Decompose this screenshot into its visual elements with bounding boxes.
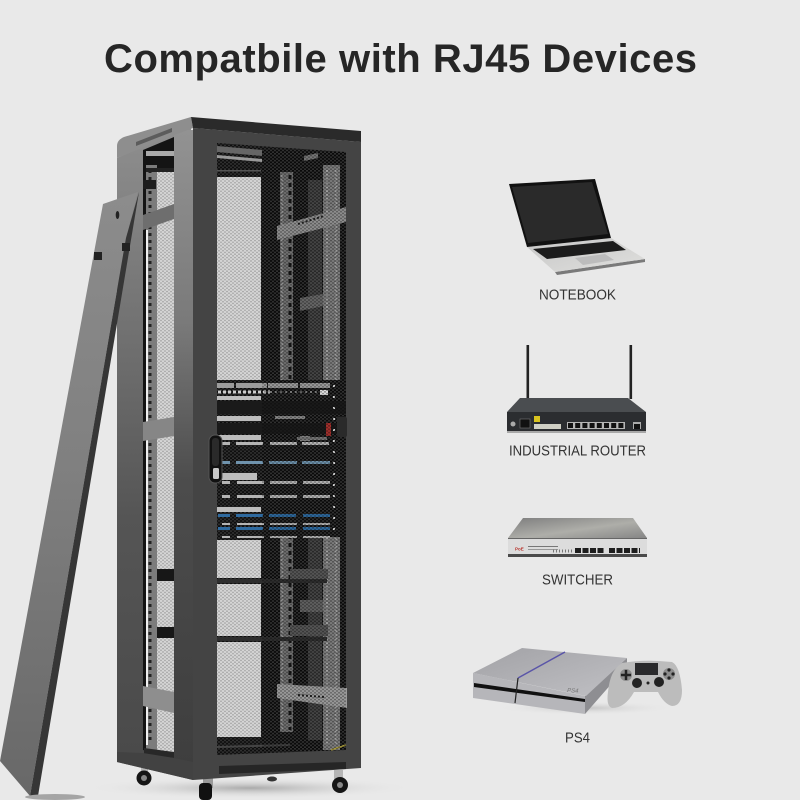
door handle — [209, 435, 222, 483]
floor shadow — [85, 777, 415, 799]
device: switcher — [508, 518, 647, 588]
title: Compatbile with RJ45 Devices — [104, 37, 697, 81]
device: industrial router — [507, 345, 646, 460]
door mesh window — [217, 143, 347, 755]
door hinge lock — [337, 417, 347, 437]
label: PS4: PS4 — [565, 730, 590, 746]
device: notebook — [509, 179, 645, 304]
panel ground shadow — [25, 794, 85, 800]
rear post — [308, 180, 322, 740]
panel latch holes — [94, 211, 130, 260]
base plinth side — [117, 752, 193, 780]
front door frame — [193, 128, 361, 780]
panel face — [0, 192, 138, 796]
icon: router — [507, 345, 646, 433]
detached side panel — [0, 192, 139, 800]
patch panels — [217, 380, 346, 538]
side frame — [117, 124, 193, 780]
icon: controller — [608, 661, 682, 708]
label: notebook: NOTEBOOK — [539, 288, 616, 304]
casters — [136, 765, 348, 800]
label: switcher: SWITCHER — [542, 572, 613, 588]
plinth vent — [219, 762, 346, 774]
network server cabinet — [85, 117, 415, 800]
vertical rails — [280, 165, 340, 750]
device: PS4 — [473, 648, 682, 746]
top cap — [117, 117, 361, 158]
rear perforated panel — [217, 177, 261, 737]
console shadow — [495, 701, 675, 715]
upper cross rail — [277, 207, 346, 240]
small bracket — [300, 294, 323, 311]
icon: console: PS4 — [567, 688, 579, 695]
lower brackets — [217, 569, 328, 641]
top shelf — [217, 146, 318, 172]
side opening — [143, 137, 174, 758]
panel dark edge — [30, 192, 139, 796]
label: industrial router: INDUSTRIAL ROUTER — [509, 444, 646, 460]
corner post — [174, 130, 193, 770]
icon: console — [473, 648, 627, 714]
icon: switch: PoE — [515, 546, 524, 552]
icon: laptop — [509, 179, 645, 275]
lower cross rail — [277, 684, 347, 708]
door perforation overlay — [262, 150, 346, 752]
